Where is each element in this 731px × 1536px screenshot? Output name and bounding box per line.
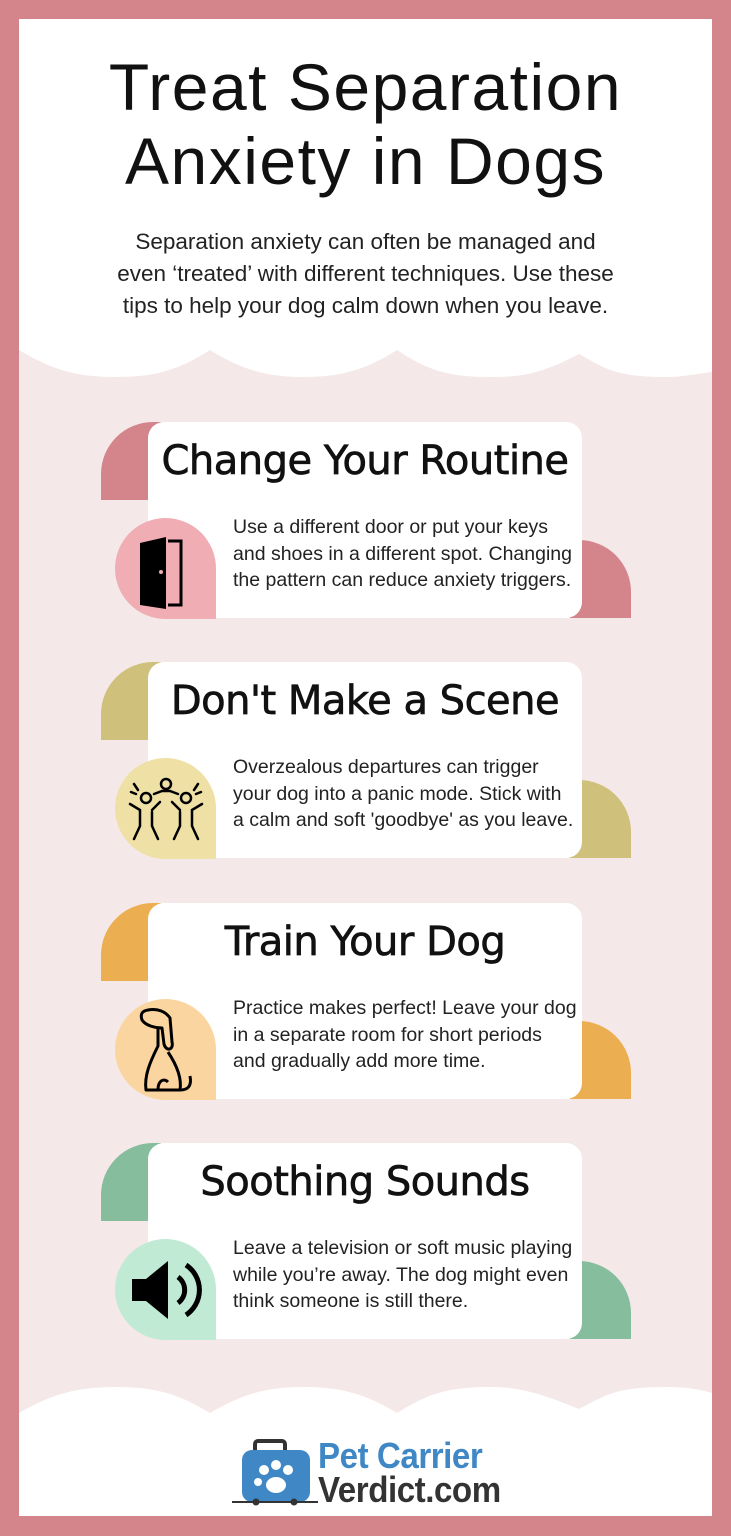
logo: Verdict.com [318, 1469, 501, 1510]
card 2: don't make a scene [101, 662, 631, 859]
card 4: soothing sounds: think someone is still there. [233, 1290, 468, 1312]
logo: Pet Carrier [318, 1435, 482, 1476]
card 1: change routine: Use a different door or put your keys [233, 516, 548, 538]
subtitle: even ‘treated’ with different techniques. Use these [117, 261, 614, 286]
card 3: train your dog [101, 903, 631, 1100]
card 2: don't make a scene: a calm and soft 'goodbye' as you leave. [233, 809, 573, 831]
card 2: don't make a scene: your dog into a panic mode. Stick with [233, 782, 561, 804]
card 3: train your dog: Train Your Dog [225, 919, 505, 965]
card 1: change routine: and shoes in a different spot. Changing [233, 542, 572, 564]
card 1: change routine [101, 422, 631, 619]
subtitle [117, 229, 614, 318]
top white header with scallops [19, 19, 712, 377]
card 1: change routine: the pattern can reduce anxiety triggers. [233, 569, 571, 591]
icon: door [115, 518, 216, 619]
title [109, 50, 622, 198]
card 4: soothing sounds: Soothing Sounds [200, 1159, 530, 1205]
icon: speaker [115, 1239, 216, 1340]
logo [232, 1435, 501, 1510]
bottom white footer with scallops [19, 1387, 712, 1516]
card 3: train your dog: Practice makes perfect! Leave your dog [233, 997, 577, 1019]
icon: cheering people [115, 758, 216, 859]
card 4: soothing sounds: Leave a television or soft music playing [233, 1237, 572, 1259]
subtitle: tips to help your dog calm down when you leave. [123, 293, 608, 318]
subtitle: Separation anxiety can often be managed and [135, 229, 596, 254]
icon: sitting dog [115, 999, 216, 1100]
card 2: don't make a scene: Overzealous departures can trigger [233, 756, 539, 778]
card 4: soothing sounds: while you’re away. The dog might even [233, 1264, 568, 1286]
card 3: train your dog: and gradually add more time. [233, 1050, 486, 1072]
card 2: don't make a scene: Don't Make a Scene [171, 678, 559, 724]
card 1: change routine: Change Your Routine [161, 438, 569, 484]
title: Anxiety in Dogs [125, 124, 606, 198]
card 3: train your dog: in a separate room for short periods [233, 1024, 542, 1046]
title: Treat Separation [109, 50, 622, 124]
